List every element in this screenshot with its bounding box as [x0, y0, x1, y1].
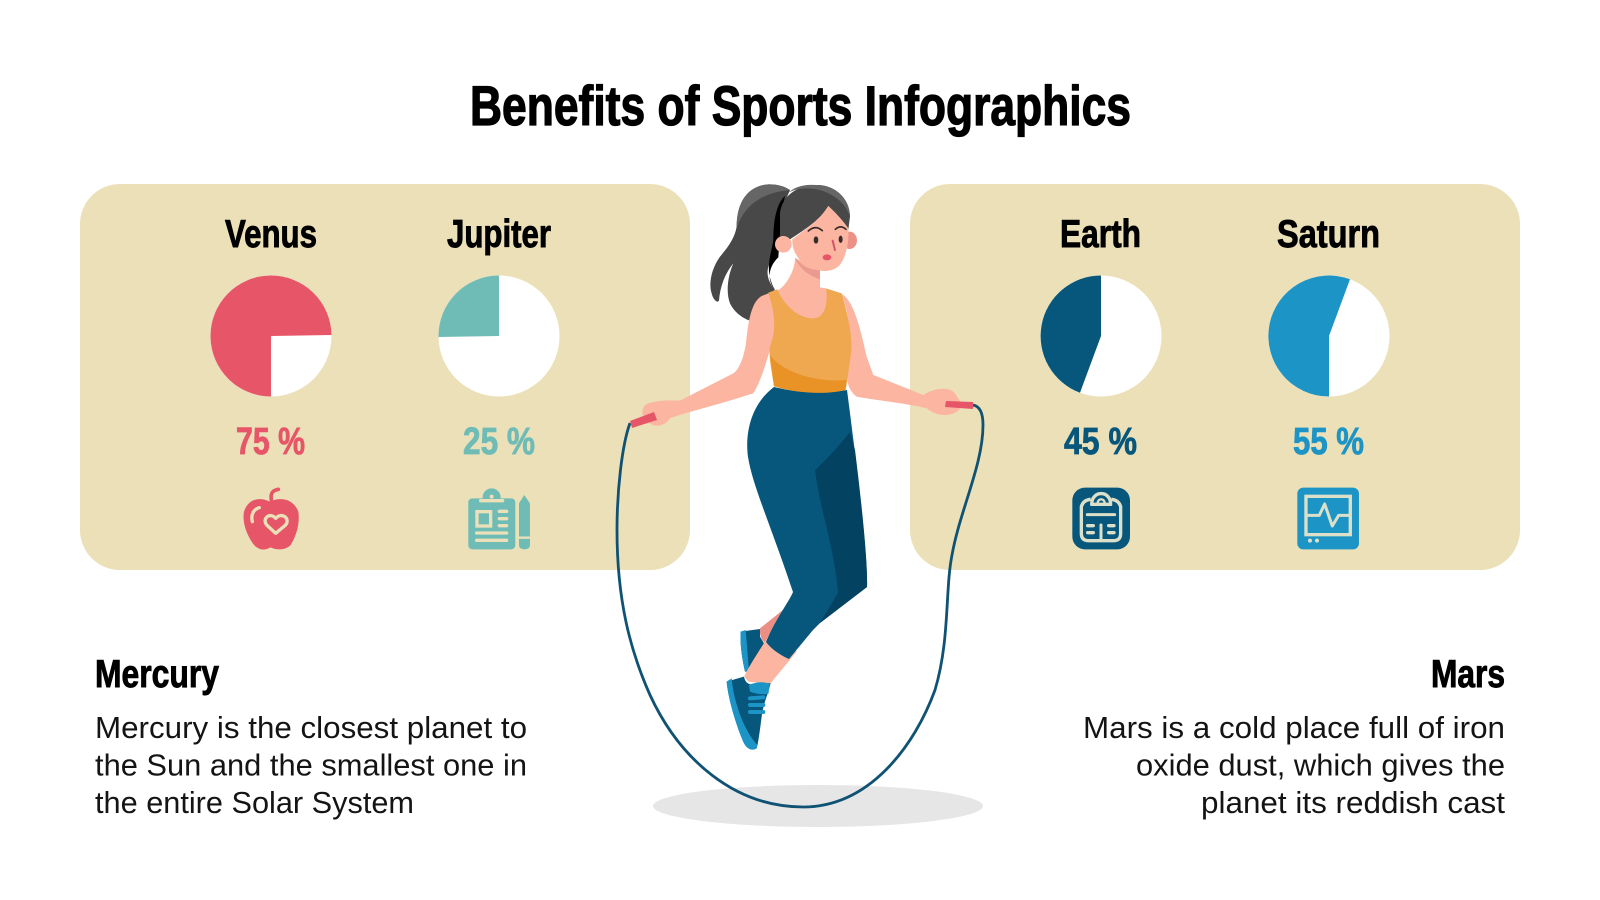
- heading: Jupiter: Jupiter: [447, 213, 551, 256]
- upper body and hair: [642, 184, 961, 426]
- icon: weighing scale: [1072, 488, 1130, 549]
- heading: Saturn: Saturn: [1277, 213, 1380, 256]
- illustration: woman jumping rope: [617, 184, 983, 827]
- pie chart: Earth 45%: [1040, 276, 1162, 396]
- title: Benefits of Sports Infographics: [470, 74, 1131, 137]
- heading: Mars: Mars: [1431, 653, 1505, 696]
- text block: Mars description: oxide dust, which gives the: [1136, 748, 1505, 782]
- value: 75%: 75 %: [236, 421, 305, 463]
- right rope handle: [945, 401, 973, 409]
- feet and shoes: [727, 608, 797, 750]
- text block: Mercury description: Mercury is the closest planet to: [95, 710, 527, 745]
- jump rope: [617, 405, 983, 807]
- value: 25%: 25 %: [463, 421, 535, 463]
- pie chart: Venus 75%: [210, 275, 332, 396]
- heading: Earth: Earth: [1060, 213, 1141, 256]
- text block: Mercury description: the Sun and the smallest one in: [95, 748, 527, 782]
- text block: Mars description: [1083, 710, 1505, 820]
- text block: Mars description: Mars is a cold place full of iron: [1083, 710, 1505, 745]
- heading: Venus: Venus: [225, 213, 317, 256]
- pie chart: Saturn 55%: [1268, 276, 1390, 397]
- text block: Mars description: planet its reddish cast: [1201, 785, 1505, 820]
- value: 45%: 45 %: [1064, 421, 1137, 463]
- panel: left stats: [80, 184, 690, 570]
- leggings: [747, 387, 867, 659]
- icon: clipboard and pen: [468, 488, 530, 549]
- heading: Mercury: Mercury: [95, 653, 219, 696]
- panel: right stats: [910, 184, 1520, 570]
- text block: Mercury description: the entire Solar System: [95, 785, 414, 820]
- ground shadow: [653, 785, 983, 827]
- icon: apple with heart: [244, 489, 299, 550]
- pie chart: Jupiter 25%: [438, 276, 560, 396]
- left rope handle: [630, 412, 657, 428]
- text block: Mercury description: [95, 710, 527, 820]
- value: 55%: 55 %: [1293, 421, 1364, 463]
- icon: heart monitor: [1297, 488, 1359, 549]
